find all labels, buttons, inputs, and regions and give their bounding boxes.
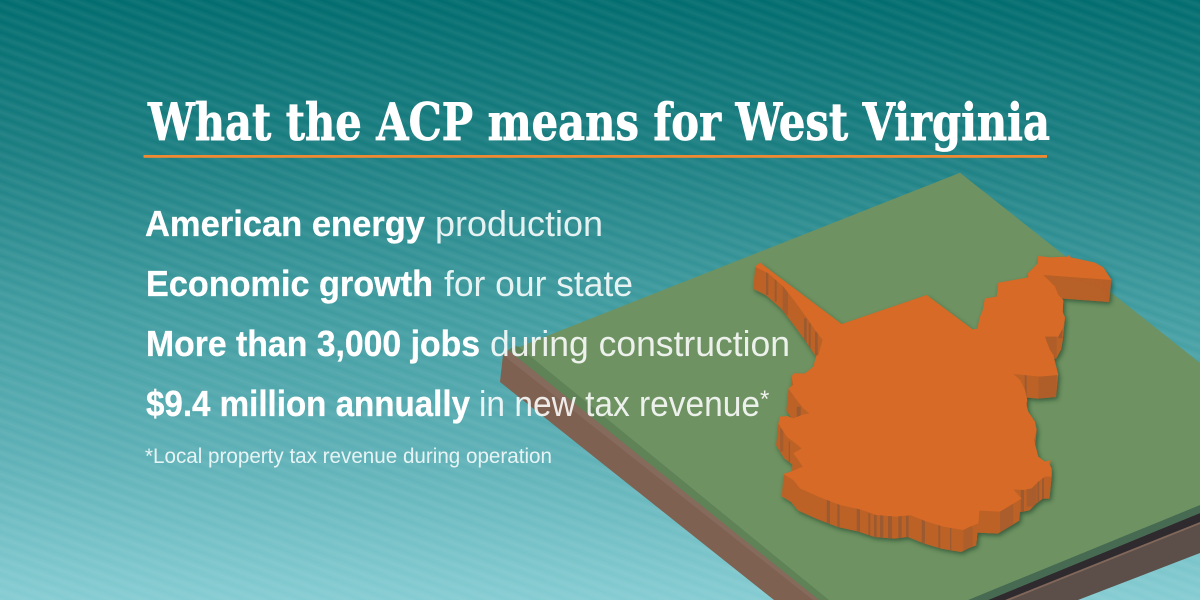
benefit: Economic growth for our state: Economic growth <box>146 263 433 304</box>
block left side: soil highlight <box>503 350 820 600</box>
map side shading stripes <box>766 270 1113 555</box>
block right side: dark green edge <box>968 505 1200 600</box>
benefit: $9.4 million annually in new tax revenue: $9.4 million annually <box>146 383 470 424</box>
block top: green surface <box>519 173 1200 600</box>
benefit: American energy production <box>145 203 603 244</box>
benefit: American energy production: American energy <box>145 203 425 244</box>
map extrusion sides <box>753 256 1112 552</box>
benefit: Economic growth for our state: for our state <box>444 263 633 304</box>
benefit: $9.4 million annually in new tax revenue <box>146 383 769 424</box>
map top face <box>755 255 1112 530</box>
block side: dark green edge <box>508 346 1200 600</box>
isometric land block <box>500 173 1200 600</box>
benefit: More than 3,000 jobs during construction <box>146 323 790 364</box>
benefit: Economic growth for our state <box>146 263 633 304</box>
benefit: More than 3,000 jobs during construction: during construction <box>490 323 790 364</box>
West Virginia extruded map <box>753 255 1113 555</box>
block left side: brown soil <box>500 355 830 600</box>
benefit: $9.4 million annually in new tax revenue: * <box>760 386 769 413</box>
title underline <box>144 155 1047 158</box>
block right side: dark brown <box>820 500 1200 600</box>
footnote: *Local property tax revenue during operation <box>145 445 552 468</box>
benefit: More than 3,000 jobs during construction: More than 3,000 jobs <box>146 323 480 364</box>
block right side: highlight line <box>1003 522 1200 600</box>
block right side: black layer <box>985 513 1200 600</box>
benefit: American energy production: production <box>435 203 603 244</box>
benefit: $9.4 million annually in new tax revenue: in new tax revenue <box>479 383 760 424</box>
